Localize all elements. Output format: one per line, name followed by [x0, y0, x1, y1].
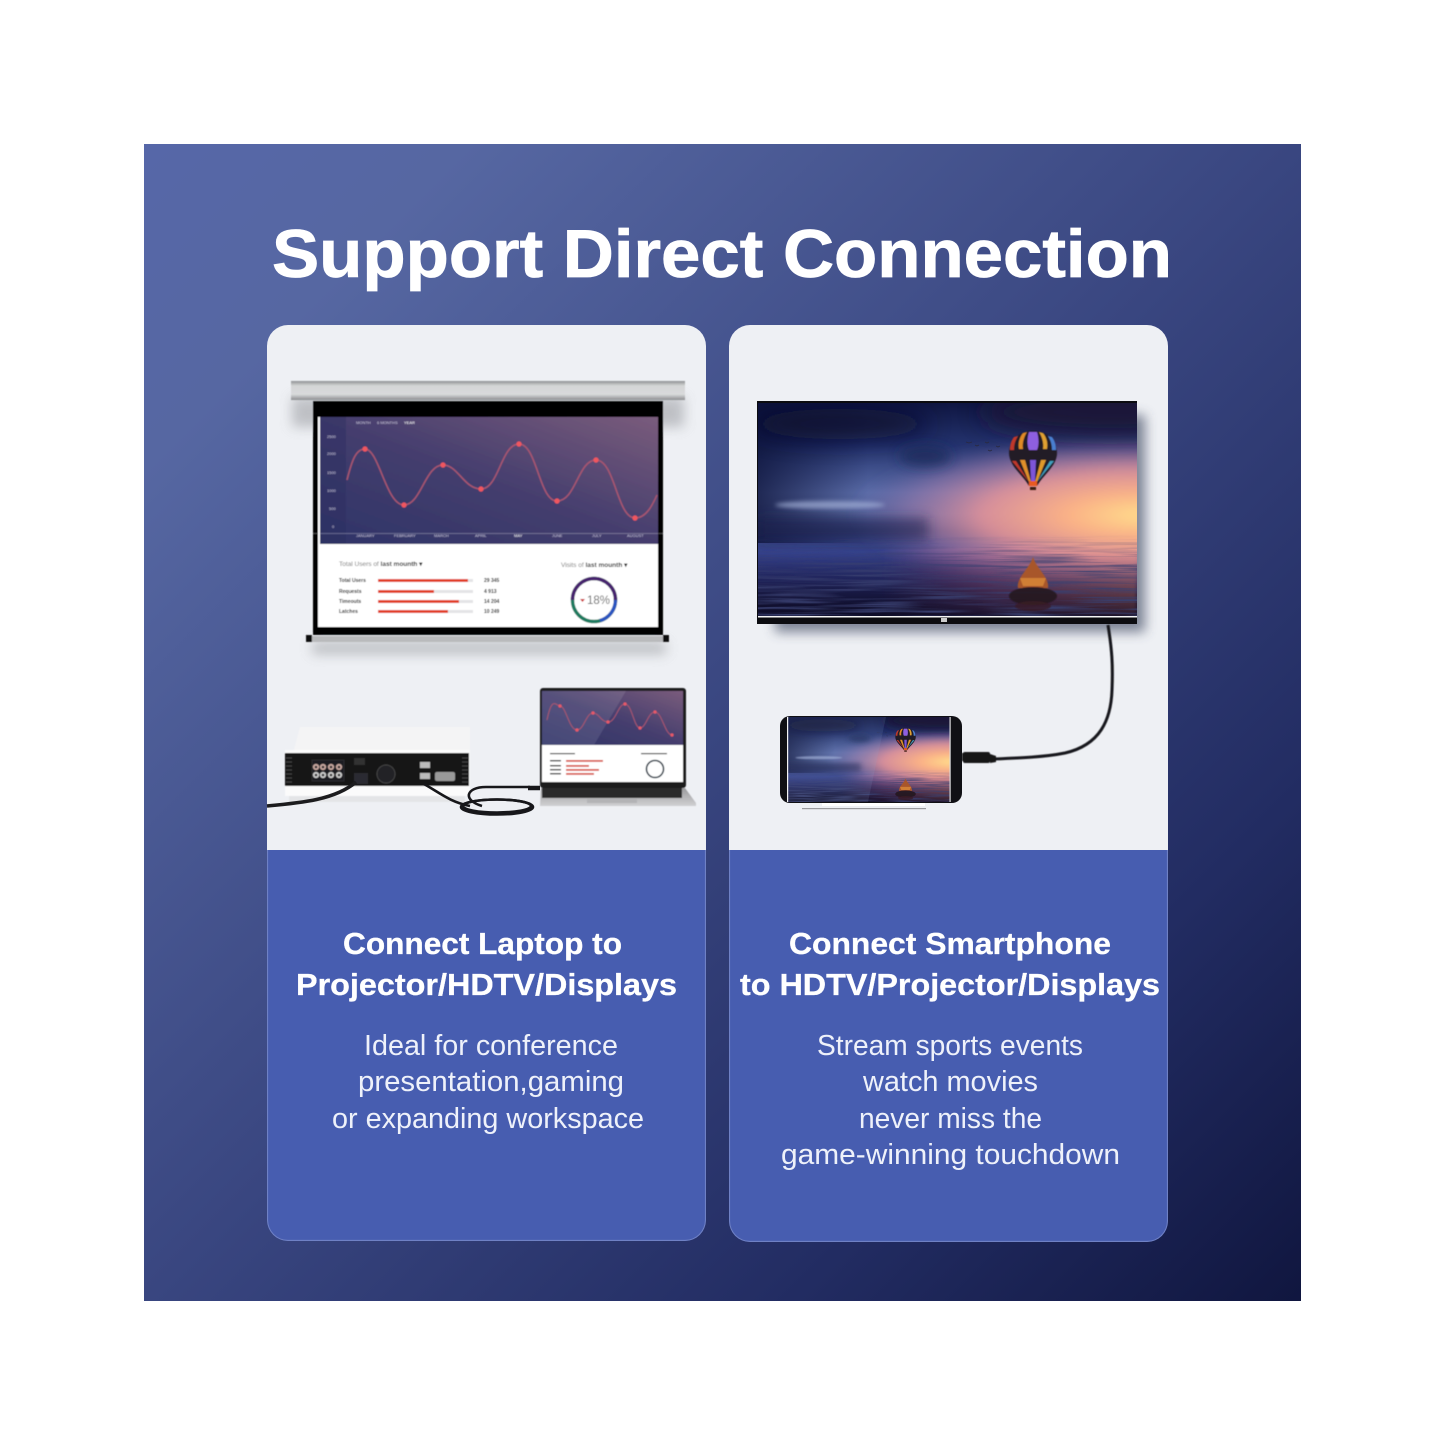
line chart: 2000	[327, 451, 337, 456]
line chart: MARCH	[434, 533, 449, 538]
users stats: Latches	[339, 609, 358, 615]
card heading: laptop	[296, 926, 677, 1002]
line chart: JUNE	[552, 533, 563, 538]
line chart: JANUARY	[356, 533, 375, 538]
cable: power	[267, 782, 356, 806]
card text: smartphone: watch movies	[862, 1066, 1038, 1098]
users stats: 10 249	[484, 609, 500, 615]
cable: phone to TV	[994, 625, 1112, 759]
card text: laptop: presentation,gaming	[358, 1066, 624, 1098]
line chart: 1500	[327, 470, 337, 475]
title: Support Direct Connection	[272, 216, 1172, 292]
users stats: Total Users of last mounth ▾	[339, 561, 423, 568]
illustration: smartphone	[780, 711, 1075, 809]
connector: USB-C	[962, 752, 996, 763]
card heading: smartphone: Connect Smartphone	[789, 926, 1111, 961]
illustration: projector screen with dashboard	[291, 381, 685, 654]
line chart: JULY	[592, 533, 602, 538]
users stats: 4 913	[484, 589, 497, 595]
users stats: 14 204	[484, 599, 500, 605]
users stats: Total Users	[339, 578, 366, 584]
panel: smartphone to HDTV	[729, 325, 1168, 1242]
card heading: laptop: Connect Laptop to	[343, 926, 622, 961]
line chart: 0	[332, 524, 335, 529]
line chart: 500	[329, 506, 336, 511]
line chart: MONTH	[356, 420, 371, 425]
card text: laptop: or expanding workspace	[332, 1103, 644, 1135]
line chart	[327, 420, 657, 538]
users stats: Requests	[339, 589, 362, 595]
card heading: laptop: Projector/HDTV/Displays	[296, 967, 677, 1002]
card text: smartphone	[781, 1030, 1120, 1171]
line chart: YEAR	[404, 420, 415, 425]
line chart: MAY	[514, 533, 523, 538]
card text: smartphone: Stream sports events	[817, 1030, 1083, 1062]
cable: HDMI to laptop	[424, 784, 540, 814]
users stats: 29 345	[484, 578, 500, 584]
visits donut: 18%	[587, 595, 610, 607]
line chart: 6 MONTHS	[377, 420, 398, 425]
illustration: projector	[285, 727, 470, 802]
users stats	[339, 561, 500, 615]
card text: laptop	[332, 1030, 644, 1135]
panel: laptop to projector	[267, 325, 706, 1241]
line chart: APRIL	[475, 533, 487, 538]
line chart: FEBRUARY	[394, 533, 416, 538]
background panel	[144, 144, 1301, 1301]
card text: smartphone: never miss the	[859, 1103, 1042, 1135]
line chart: AUGUST	[627, 533, 644, 538]
card heading: smartphone: to HDTV/Projector/Displays	[740, 967, 1160, 1002]
visits donut: Visits of last mounth ▾	[561, 562, 628, 569]
card text: smartphone: game-winning touchdown	[781, 1139, 1120, 1171]
line chart: 2500	[327, 434, 337, 439]
visits donut	[561, 562, 628, 622]
card heading: smartphone	[740, 926, 1160, 1002]
illustration: laptop	[540, 688, 696, 806]
card text: laptop: Ideal for conference	[364, 1030, 618, 1062]
line chart: 1000	[327, 488, 337, 493]
illustration: TV	[750, 388, 1430, 632]
users stats: Timeouts	[339, 599, 361, 605]
